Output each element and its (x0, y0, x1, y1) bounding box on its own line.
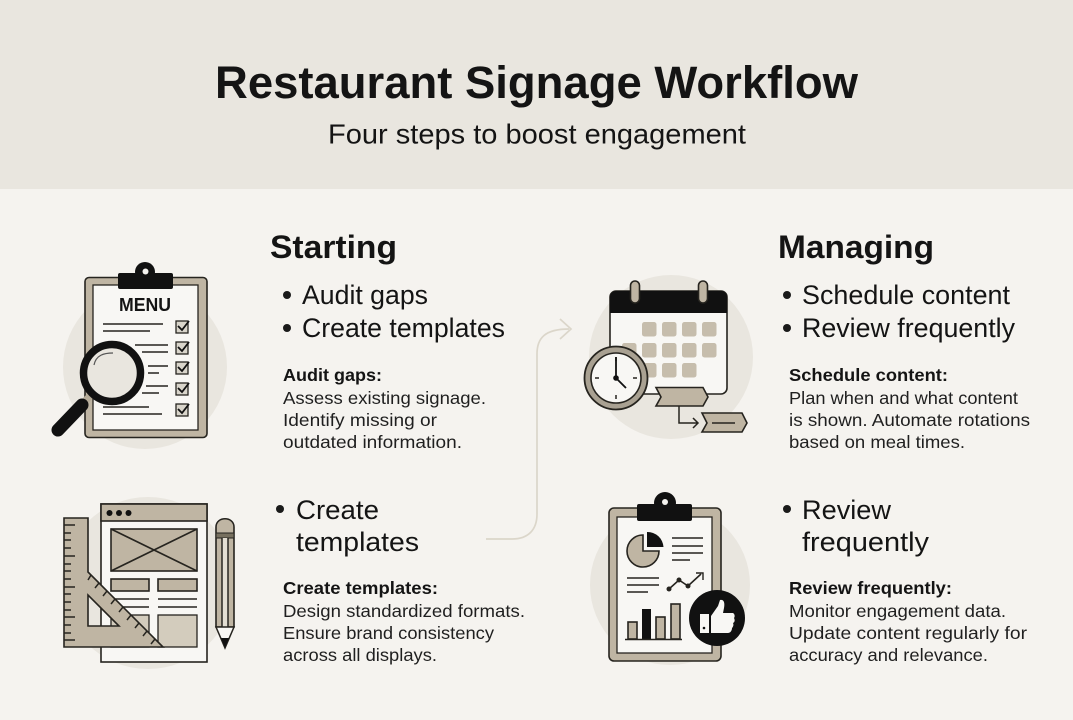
text block: review frequently: accuracy and relevance. (789, 645, 988, 665)
bullet list: managing: Schedule content (802, 280, 1011, 310)
text block: create templates (283, 578, 525, 665)
text block: review frequently: Review frequently: (789, 578, 952, 598)
text block: audit gaps: Assess existing signage. (283, 388, 486, 408)
bullet: create templates: templates (296, 527, 419, 557)
bullet list: starting (283, 280, 505, 343)
icon: calendar with clock and banners (584, 275, 753, 439)
bullet: review frequently: Review (802, 495, 892, 525)
text block: schedule content: Schedule content: (789, 365, 948, 385)
text block: audit gaps: outdated information. (283, 432, 462, 452)
bullet list: starting: Audit gaps (302, 280, 428, 310)
bullet list: starting: Create templates (302, 313, 505, 343)
bullet: review frequently: frequently (802, 527, 930, 557)
arrow: connector from templates to managing (486, 319, 571, 539)
panel: starting (270, 229, 505, 452)
bullet list: managing (783, 280, 1016, 343)
text block: audit gaps (283, 365, 486, 452)
panel: managing (778, 229, 1030, 452)
bullet list: managing: Review frequently (802, 313, 1016, 343)
bullet: create templates (276, 495, 419, 557)
text block: create templates: Create templates: (283, 578, 438, 598)
text block: review frequently: Monitor engagement data. (789, 601, 1006, 621)
text block: create templates: Design standardized formats. (283, 601, 525, 621)
text block: schedule content: Plan when and what content (789, 388, 1018, 408)
subtitle: Four steps to boost engagement (328, 118, 746, 150)
text block: create templates: across all displays. (283, 645, 437, 665)
text block: create templates: Ensure brand consistency (283, 623, 494, 643)
icon: menu clipboard with magnifier (58, 262, 227, 449)
text block: audit gaps: Audit gaps: (283, 365, 382, 385)
text block: review frequently (789, 578, 1027, 665)
text block: schedule content: based on meal times. (789, 432, 965, 452)
icon: report clipboard with thumbs up (590, 492, 750, 665)
bullet: review frequently (783, 495, 930, 557)
text block: schedule content: is shown. Automate rotations (789, 410, 1030, 430)
text block: review frequently: Update content regularly for (789, 623, 1027, 643)
panel: review frequently (783, 495, 1027, 665)
icon: template layout with ruler and pencil (62, 497, 234, 669)
heading: starting: Starting (270, 229, 397, 265)
text block: schedule content (789, 365, 1030, 452)
icon: menu clipboard with magnifier: MENU (119, 294, 171, 315)
header band (0, 0, 1073, 189)
heading: managing: Managing (778, 229, 934, 265)
panel: create templates (276, 495, 525, 665)
text block: audit gaps: Identify missing or (283, 410, 437, 430)
title: Restaurant Signage Workflow (215, 57, 859, 108)
bullet: create templates: Create (296, 495, 379, 525)
